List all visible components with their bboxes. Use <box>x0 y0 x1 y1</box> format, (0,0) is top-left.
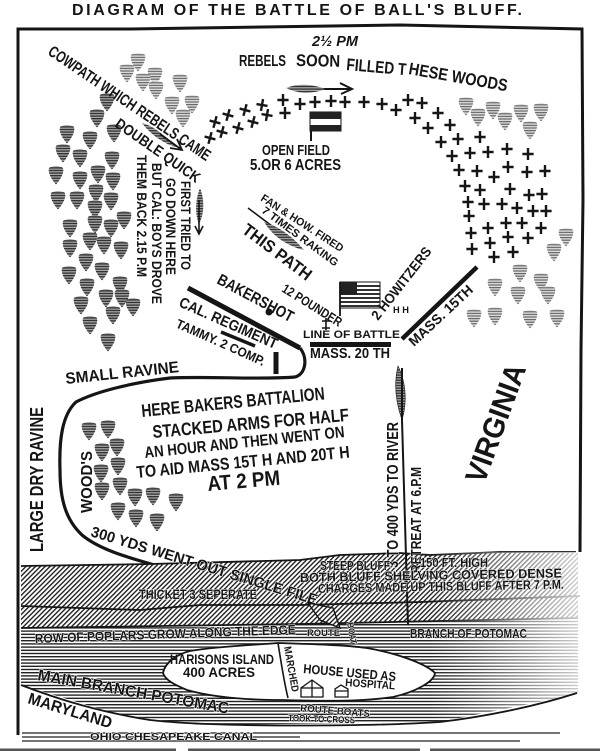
bottom scan edge <box>0 748 600 751</box>
bluff notes: STEEP BLUFF <box>320 558 390 573</box>
note: bakers battalion: HERE BAKERS BATTALION <box>140 383 326 421</box>
heading: soon filled: HESE WOODS <box>407 59 509 95</box>
fade on right of water and bluff <box>430 552 584 727</box>
woods: top left trees <box>120 53 199 128</box>
bluff hatching <box>21 552 578 630</box>
label: tammany: TAMMY. 2 COMP. <box>174 316 268 369</box>
label: hospital: HOSPITAL <box>345 677 396 692</box>
heading: soon filled <box>296 51 509 95</box>
label: double quick: DOUBLE QUICK <box>112 115 203 187</box>
label: howitzers: 2 HOWITZERS <box>368 244 435 323</box>
bluff notes: 150 FT. HIGH <box>420 555 488 570</box>
label: retreat: RETREAT AT 6.P.M <box>408 467 425 573</box>
label: cal regiment: CAL. REGIMENT <box>176 294 280 353</box>
icon: hatched landing <box>308 603 340 628</box>
note: bakers battalion: TO AID MASS 15T H AND 20T H <box>136 443 350 482</box>
label: this path: THIS PATH <box>239 220 316 285</box>
icon: shot marks <box>266 308 330 330</box>
woods: right trees <box>459 97 573 328</box>
title: DIAGRAM OF THE BATTLE OF BALL'S BLUFF. <box>72 2 522 19</box>
top arrow <box>286 83 352 94</box>
woods: left trees <box>49 93 140 352</box>
line of battle <box>303 329 400 362</box>
label: took to cross: TOOK TO CROSS <box>288 713 355 726</box>
label: bakershot: BAKERSHOT <box>214 272 296 326</box>
label: route boats: ROUTE BOATS <box>300 703 371 720</box>
note: vertical movement text <box>134 155 194 304</box>
label: yards to river: 3 TO 400 YDS TO RIVER <box>385 422 402 568</box>
note: vertical movement text: GO DOWN HERE <box>163 178 179 275</box>
heading: soon filled: FILLED T <box>346 55 408 79</box>
label: branch of potomac: BRANCH OF POTOMAC <box>410 627 527 641</box>
label: acres: 400 ACRES <box>183 664 255 680</box>
label: canal: OHIO CHESAPEAKE CANAL <box>90 732 257 743</box>
bluff notes: BOTH BLUFF SHELVING COVERED DENSE <box>300 565 562 585</box>
label: raking: 7 TIMES RAKING <box>259 205 340 269</box>
boat route <box>307 622 359 645</box>
label: pounder: 12 POUNDER <box>279 281 345 330</box>
note: bakers battalion: AT 2 PM <box>206 467 281 496</box>
label: open field: OPEN FIELD <box>262 142 330 159</box>
arrow: raking <box>248 208 304 250</box>
heading: soon filled: SOON <box>296 51 340 71</box>
boat route: BOAT <box>345 622 359 645</box>
river water <box>21 618 578 725</box>
icon: howitzer marks: H H <box>393 305 409 315</box>
label: large dry ravine: LARGE DRY RAVINE <box>27 407 47 552</box>
label: mass 15th: MASS. 15TH <box>405 282 476 349</box>
icon: houses <box>301 680 348 697</box>
harrisons island <box>163 643 435 701</box>
line of regiment <box>188 288 300 348</box>
note: bakers battalion: AN HOUR AND THEN WENT ON <box>144 424 345 462</box>
label: harisons island: HARISONS ISLAND <box>170 651 274 667</box>
label: woods: WOOD'S <box>79 451 96 513</box>
label: small ravine: SMALL RAVINE <box>65 359 180 388</box>
label: went out single file: 300 YDS WENT OUT SINGLE FILE <box>89 524 319 609</box>
label: main branch potomac: MAIN BRANCH POTOMAC <box>36 667 231 718</box>
confederate flag <box>310 112 341 141</box>
arrow: double quick <box>142 123 182 150</box>
note: vertical movement text: THEM BACK 2.15 P.M <box>134 155 150 277</box>
label: row of poplars: ROW OF POPLARS GROW ALONG THE EDGE <box>35 622 296 646</box>
ravine line <box>60 348 305 566</box>
label: virginia: VIRGINIA <box>460 360 533 487</box>
note: bakers battalion <box>136 383 350 496</box>
boat route: ROUTE <box>307 628 340 638</box>
arrow: retreat <box>396 366 408 625</box>
line: mass 15th <box>402 267 477 339</box>
label: maryland: MARYLAND <box>26 691 114 732</box>
label: marched: MARCHED <box>281 645 301 693</box>
note: vertical movement text: FIRST TRIED TO <box>178 181 194 270</box>
heading: rebels: REBELS <box>239 53 286 70</box>
rebel troops: crosses <box>203 94 552 263</box>
label: house used as: HOUSE USED AS <box>303 661 397 684</box>
line of battle: LINE OF BATTLE <box>303 329 400 341</box>
label: cowpath: COWPATH WHICH REBELS CAME <box>45 43 214 165</box>
line of battle: MASS. 20 TH <box>310 345 390 362</box>
company bars <box>221 332 276 374</box>
bluff notes <box>300 555 564 596</box>
bluff outlines <box>21 552 580 628</box>
note: vertical movement text: BUT CAL: BOYS DROVE <box>149 163 165 304</box>
note: bakers battalion: STACKED ARMS FOR HALF <box>152 405 350 442</box>
label: thicket: THICKET 3 SEPERATE <box>139 587 257 602</box>
time label: 2½ PM <box>311 33 358 50</box>
maryland shore <box>21 685 577 726</box>
label: acres: 5.OR 6 ACRES <box>250 157 341 174</box>
arrow: down <box>195 188 203 234</box>
union flag <box>340 282 380 316</box>
woods: trees inside ravine <box>82 420 183 532</box>
label: fan and how fired: FAN & HOW. FIRED <box>258 192 345 255</box>
canal band <box>22 733 560 741</box>
